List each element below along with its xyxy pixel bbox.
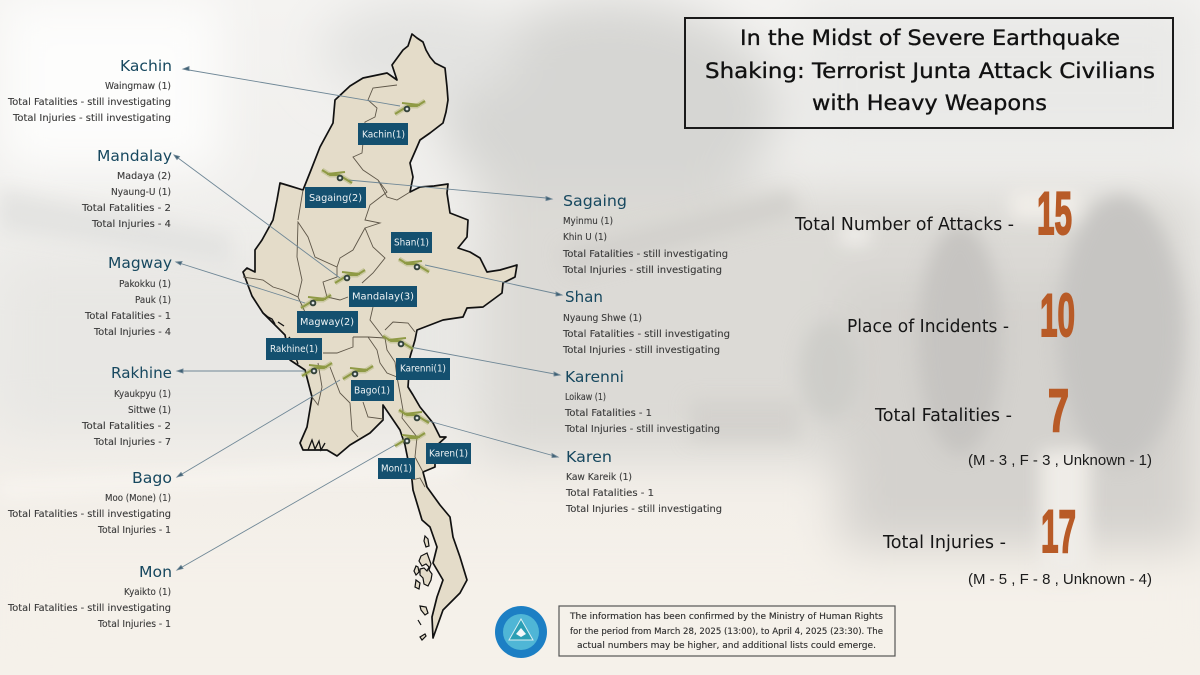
region text: Mon — [7, 563, 172, 630]
region text: Rakhine: Rakhine — [111, 364, 172, 382]
label: Shan(1): Shan(1) — [394, 238, 429, 248]
stat: total injuries: Total Injuries - — [882, 533, 1006, 553]
icon: attack Mandalay — [335, 270, 365, 283]
title box: Shaking: Terrorist Junta Attack Civilians — [705, 59, 1155, 84]
region text: Sagaing: Myinmu (1) — [563, 216, 613, 227]
region text: Magway: Total Injuries - 4 — [93, 327, 171, 338]
note: source statement — [559, 606, 895, 656]
region text: Sagaing: Total Injuries - still investigating — [562, 265, 722, 276]
icon: attack Sagaing — [322, 170, 352, 183]
label: Karen(1) — [426, 443, 471, 464]
icon: attack Waingmaw — [395, 101, 425, 114]
region text: Sagaing — [562, 192, 728, 276]
label: Kachin(1): Kachin(1) — [362, 130, 405, 140]
stat: total number of attacks: Total Number of Attacks - — [794, 215, 1014, 235]
stat: total fatalities: Total Fatalities - — [874, 406, 1012, 426]
region text: Bago: Total Injuries - 1 — [97, 525, 171, 536]
leader lines — [174, 66, 562, 570]
region text: Kachin: Waingmaw (1) — [105, 81, 171, 92]
label: Magway(2) — [297, 311, 358, 333]
region text: Shan: Shan — [565, 288, 603, 306]
stat: total fatalities — [874, 377, 1152, 469]
region text: Karen: Karen — [566, 448, 612, 466]
region text: Rakhine: Total Injuries - 7 — [93, 437, 171, 448]
region text: Magway: Pauk (1) — [135, 295, 171, 306]
region text: Magway: Magway — [108, 254, 172, 272]
label: Karen(1): Karen(1) — [429, 448, 468, 460]
stat: place of incidents — [847, 282, 1075, 349]
icon: attack Shan — [399, 259, 429, 272]
region text: Mandalay — [81, 147, 172, 230]
region text: Shan: Total Injuries - still investigating — [562, 345, 720, 356]
region borders — [243, 85, 425, 487]
region text: Mon: Mon — [139, 563, 172, 581]
stat: total fatalities: (M - 3 , F - 3 , Unknown - 1) — [968, 453, 1152, 469]
region text: Rakhine — [81, 364, 172, 448]
region text: Mon: Total Injuries - 1 — [97, 619, 171, 630]
icon: attack Bago — [343, 366, 373, 379]
title box — [685, 18, 1173, 128]
region text: Magway: Total Fatalities - 1 — [84, 311, 171, 322]
stat: total injuries — [882, 498, 1152, 588]
note: source statement: The information has been confirmed by the Ministry of Human Rights — [569, 612, 883, 622]
region text: Mon: Total Fatalities - still investigating — [7, 603, 171, 614]
region text: Mandalay: Total Injuries - 4 — [91, 219, 171, 230]
icon: attack Rakhine — [302, 363, 332, 376]
label: Mon(1): Mon(1) — [381, 464, 412, 474]
region text: Rakhine: Kyaukpyu (1) — [114, 389, 171, 400]
label: Mon(1) — [378, 458, 415, 479]
note: source statement: actual numbers may be higher, and additional lists could emerge. — [577, 641, 876, 651]
stat: place of incidents: 10 — [1040, 282, 1075, 349]
label: Mandalay(3): Mandalay(3) — [352, 292, 414, 302]
region text: Karenni — [564, 368, 720, 435]
label: Shan(1) — [391, 232, 432, 253]
region text: Sagaing: Sagaing — [563, 192, 627, 210]
region text: Shan: Total Fatalities - still investigating — [562, 329, 730, 340]
region text: Sagaing: Khin U (1) — [563, 232, 607, 243]
icon: attack Karenni — [383, 336, 413, 349]
stat: total injuries: 17 — [1041, 498, 1076, 565]
region text: Shan — [562, 288, 730, 356]
region text: Mandalay: Mandalay — [97, 147, 172, 165]
region text: Karenni: Loikaw (1) — [565, 392, 606, 403]
label: Bago(1) — [351, 380, 394, 401]
stat: total number of attacks — [794, 180, 1072, 247]
title box: In the Midst of Severe Earthquake — [740, 26, 1120, 51]
logo: Ministry of Human Rights — [495, 606, 547, 658]
region text: Mon: Kyaikto (1) — [124, 587, 171, 598]
label: Mandalay(3) — [349, 286, 417, 307]
label: Kachin(1) — [358, 123, 408, 145]
region text: Karen — [565, 448, 722, 515]
stat: total injuries: (M - 5 , F - 8 , Unknown - 4) — [968, 572, 1152, 588]
label: Karenni(1) — [396, 358, 450, 380]
map outline — [243, 34, 517, 638]
region text: Kachin: Total Injuries - still investigating — [12, 113, 171, 124]
region text: Karenni: Karenni — [565, 368, 624, 386]
label: Sagaing(2): Sagaing(2) — [309, 193, 362, 204]
region text: Rakhine: Sittwe (1) — [128, 405, 171, 416]
region text: Bago: Total Fatalities - still investigating — [7, 509, 171, 520]
region text: Kachin — [7, 57, 172, 124]
title box: with Heavy Weapons — [812, 91, 1047, 116]
label: Rakhine(1) — [266, 338, 322, 360]
region text: Mandalay: Total Fatalities - 2 — [81, 203, 171, 214]
icon: attack Karen — [399, 410, 429, 423]
label: Magway(2): Magway(2) — [300, 317, 354, 328]
map labels and attack icons — [266, 101, 471, 479]
region text: Bago — [7, 469, 172, 536]
region text: Bago: Moo (Mone) (1) — [105, 493, 171, 504]
region text: Karenni: Total Fatalities - 1 — [564, 408, 652, 419]
region text: Magway: Pakokku (1) — [119, 279, 171, 290]
region text: Shan: Nyaung Shwe (1) — [563, 313, 642, 324]
icon: attack Magway — [301, 295, 331, 308]
region text: Mandalay: Madaya (2) — [117, 171, 171, 182]
label: Rakhine(1): Rakhine(1) — [270, 344, 318, 355]
note: source statement: for the period from March 28, 2025 (13:00), to April 4, 2025 (23:30). The — [570, 627, 883, 637]
label: Sagaing(2) — [305, 187, 366, 208]
region text: Kachin: Total Fatalities - still investigating — [7, 97, 171, 108]
region text: Karen: Kaw Kareik (1) — [566, 472, 632, 483]
region text: Karen: Total Injuries - still investigating — [565, 504, 722, 515]
label: Karenni(1): Karenni(1) — [400, 364, 446, 374]
stat: place of incidents: Place of Incidents - — [847, 317, 1009, 337]
stat: total number of attacks: 15 — [1037, 180, 1072, 247]
region text: Mandalay: Nyaung-U (1) — [111, 187, 171, 198]
icon: attack Mon — [395, 433, 425, 446]
label: Bago(1): Bago(1) — [354, 386, 390, 396]
region text: Karenni: Total Injuries - still investigating — [564, 424, 720, 435]
region text: Bago: Bago — [132, 469, 172, 487]
map of Myanmar — [243, 34, 517, 640]
region text: Karen: Total Fatalities - 1 — [565, 488, 654, 499]
region text: Magway — [84, 254, 172, 338]
region text: Kachin: Kachin — [120, 57, 172, 75]
region text: Rakhine: Total Fatalities - 2 — [81, 421, 171, 432]
region text: Sagaing: Total Fatalities - still investigating — [562, 249, 728, 260]
islands — [414, 536, 432, 640]
stat: total fatalities: 7 — [1048, 377, 1069, 444]
